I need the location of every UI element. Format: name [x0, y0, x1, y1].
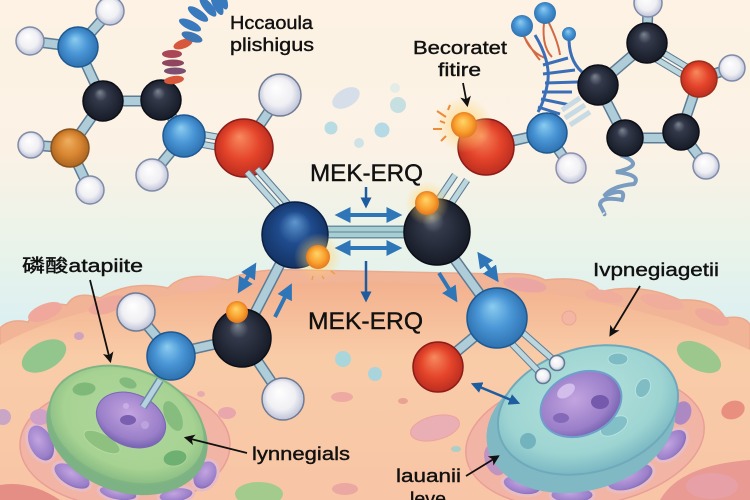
atoms: [413, 288, 564, 392]
atom: navy: [262, 202, 328, 268]
arrows: interaction arrows: [241, 187, 516, 402]
spark on black atom: [405, 181, 449, 225]
blue and red fern strands: [511, 2, 582, 114]
green cell nucleus: [88, 382, 174, 458]
atoms: [117, 293, 304, 420]
molecule: top-right structure: [433, 0, 745, 214]
lower squiggle: [600, 155, 636, 214]
label arrow: top-right: [463, 83, 467, 104]
label arrow: teal cell: [466, 457, 497, 476]
panel: green cell: [28, 345, 226, 500]
label: green cell: lynnegials: [252, 443, 350, 464]
label: top-right: fitire: [438, 59, 481, 80]
molecule: top-left structure: [16, 0, 301, 204]
panel: tissue layer: [0, 270, 750, 500]
heading: upper MEK-ERQ: MEK-ERQ: [310, 160, 423, 187]
panel: purple cells under green cell: [20, 383, 230, 500]
molecule: lower-right structure: [413, 288, 564, 392]
label: top-left: Hccaoula: [230, 12, 314, 33]
label arrow: left: [90, 280, 110, 360]
label: right: Ivpnegiagetii: [593, 259, 719, 280]
heading: lower MEK-ERQ: MEK-ERQ: [308, 308, 423, 335]
label: top-left: plishigus: [230, 34, 314, 55]
molecule: lower-left structure: [117, 293, 304, 420]
glowing spark atom: [433, 97, 492, 153]
atom: black: [404, 199, 470, 265]
atoms: [16, 0, 301, 204]
atoms: [458, 0, 745, 183]
label: top-right: Becoratet: [413, 37, 507, 58]
label arrow: right: [611, 286, 640, 334]
label: left: 磷酸atapiite: [22, 256, 143, 276]
teal cell nucleus: [530, 359, 632, 449]
panel: purple cells under teal cell: [457, 358, 750, 500]
label arrow: green cell: [187, 438, 247, 453]
molecule: central double bonds: [242, 169, 497, 338]
label: teal cell: lauanii: [396, 465, 461, 486]
panel: teal cell: [472, 325, 694, 500]
floating vesicles: [324, 83, 406, 148]
spark on navy atom: [294, 233, 342, 281]
helix: top-left coil: [162, 0, 230, 85]
